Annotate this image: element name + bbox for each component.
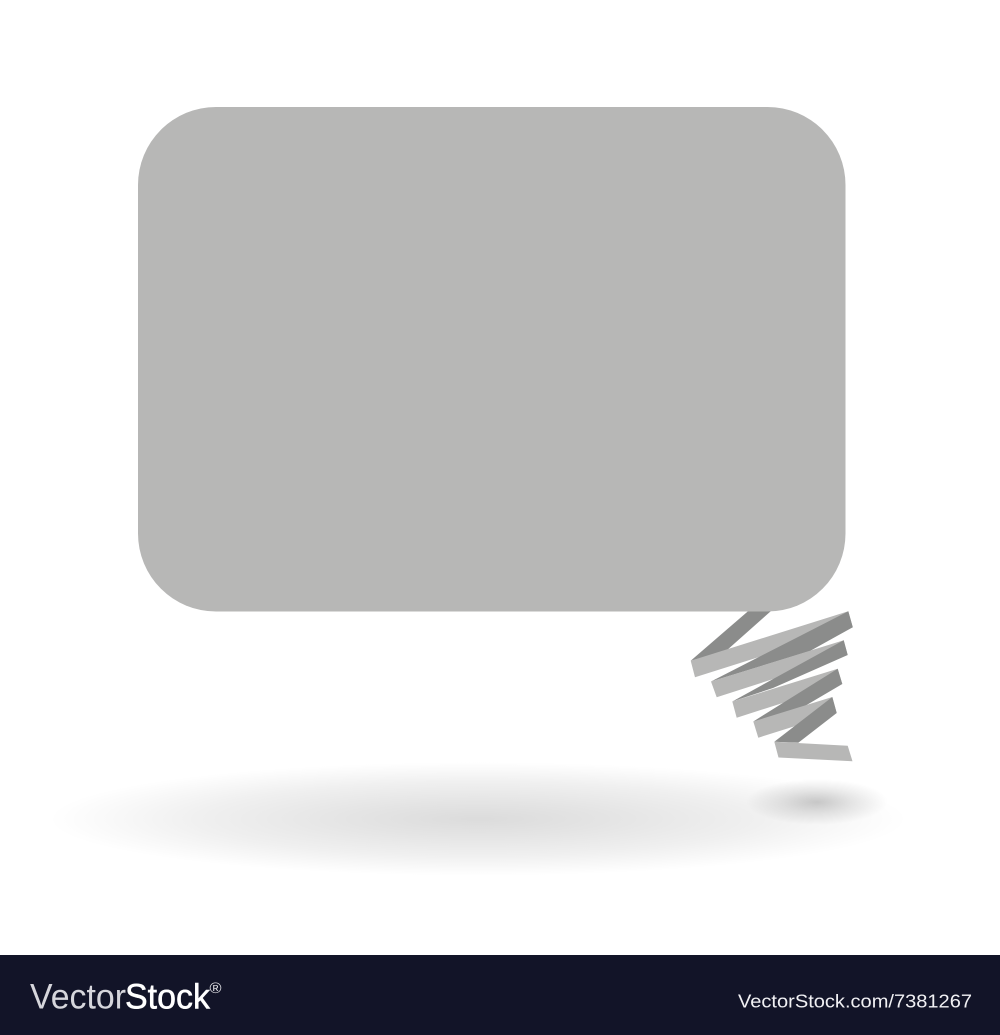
shadow: small ellipse under tail xyxy=(746,779,888,825)
speech bubble body xyxy=(138,107,846,612)
footer logo: VectorStock: ® xyxy=(210,980,222,997)
footer logo: VectorStock: Stock xyxy=(125,978,210,1016)
footer bar xyxy=(0,955,1000,1035)
speech bubble tail: folded ribbon xyxy=(691,611,853,761)
footer image reference: VectorStock.com/7381267: VectorStock.com/7381267 xyxy=(738,990,972,1012)
footer logo: VectorStock: Vector xyxy=(30,978,126,1016)
shadow: large ellipse under bubble xyxy=(48,762,908,876)
footer logo: VectorStock xyxy=(30,978,222,1016)
